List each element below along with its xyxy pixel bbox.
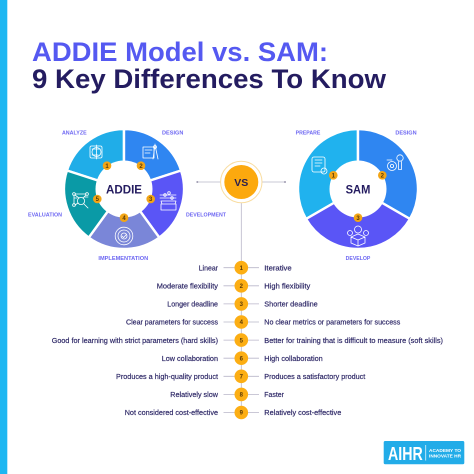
icon: design bbox=[387, 155, 403, 170]
row 4: Clear parameters for success bbox=[126, 318, 218, 327]
icon: analyze bbox=[90, 145, 102, 159]
row 9 bbox=[125, 406, 341, 419]
chart: ADDIE wheel bbox=[28, 129, 227, 262]
badge: ADDIE 2: 2 bbox=[139, 164, 143, 170]
label: design: DESIGN bbox=[395, 130, 417, 136]
row 8: 8 bbox=[240, 393, 244, 399]
badge: ADDIE 2 bbox=[137, 161, 145, 170]
badge: ADDIE 3: 3 bbox=[149, 197, 153, 203]
icon: prepare bbox=[312, 157, 327, 174]
segment: development bbox=[124, 170, 184, 238]
logo: AIHR: INNOVATE HR bbox=[429, 453, 461, 458]
row 6: High collaboration bbox=[264, 354, 323, 363]
label: implementation: IMPLEMENTATION bbox=[98, 256, 148, 262]
segment: implementation bbox=[89, 189, 159, 249]
label: develop: DEVELOP bbox=[346, 256, 371, 262]
segment: develop bbox=[306, 189, 410, 249]
badge: ADDIE 5: 5 bbox=[96, 197, 100, 203]
segment: design bbox=[124, 129, 181, 189]
logo: AIHR: AIHR bbox=[388, 444, 423, 464]
row 6: 6 bbox=[240, 356, 244, 362]
row 8: Relatively slow bbox=[170, 390, 218, 399]
segment: design bbox=[358, 129, 418, 219]
label: design: DESIGN bbox=[162, 130, 183, 136]
row 4: No clear metrics or parameters for success bbox=[264, 318, 400, 327]
row 9: 9 bbox=[240, 411, 244, 417]
icon: develop bbox=[348, 226, 368, 246]
icon: evaluation bbox=[73, 193, 88, 208]
center hub: ADDIE: ADDIE bbox=[106, 184, 142, 196]
title bbox=[32, 37, 387, 94]
row 7: Produces a satisfactory product bbox=[264, 372, 366, 381]
segment: analyze bbox=[67, 129, 124, 189]
row 3: Longer deadline bbox=[167, 300, 218, 309]
connector: VS to wheels and list bbox=[196, 181, 286, 412]
icon: development bbox=[160, 192, 176, 210]
row 1: 1 bbox=[240, 266, 244, 272]
badge: ADDIE 1: 1 bbox=[105, 164, 109, 170]
row 2: High flexibility bbox=[264, 282, 310, 290]
row 3: Shorter deadline bbox=[264, 300, 318, 309]
row 2 bbox=[157, 279, 310, 293]
row 2: Moderate flexibility bbox=[157, 282, 218, 290]
row 4: 4 bbox=[240, 320, 244, 326]
logo: AIHR: ACADEMY TO bbox=[429, 448, 462, 453]
segment: prepare bbox=[298, 129, 358, 219]
badge: SAM 3: 3 bbox=[356, 216, 360, 222]
row 2: 2 bbox=[240, 284, 244, 290]
row 5: Good for learning with strict parameters (hard skills) bbox=[52, 336, 218, 345]
row 8 bbox=[170, 388, 284, 401]
center hub: SAM: SAM bbox=[346, 184, 370, 196]
row 3: 3 bbox=[240, 302, 244, 308]
label: prepare: PREPARE bbox=[296, 130, 321, 136]
badge: ADDIE 4: 4 bbox=[122, 216, 126, 222]
row 7: 7 bbox=[240, 374, 244, 380]
label: analyze: ANALYZE bbox=[62, 130, 87, 136]
icon: design bbox=[143, 144, 158, 159]
chart: SAM wheel bbox=[296, 129, 418, 262]
label: development: DEVELOPMENT bbox=[186, 213, 227, 219]
left accent bar bbox=[0, 0, 7, 474]
title: 9 Key Differences To Know bbox=[32, 64, 387, 94]
row 8: Faster bbox=[264, 390, 284, 399]
row 9: Relatively cost-effective bbox=[264, 408, 341, 417]
icon: implementation bbox=[115, 227, 133, 245]
row 9: Not considered cost-effective bbox=[125, 408, 218, 417]
row 7 bbox=[116, 370, 366, 383]
title: ADDIE Model vs. SAM: bbox=[32, 37, 328, 67]
logo: AIHR bbox=[384, 441, 464, 464]
row 5: 5 bbox=[240, 338, 244, 344]
badge: ADDIE 3 bbox=[146, 195, 155, 203]
row 6: Low collaboration bbox=[162, 354, 218, 363]
label: evaluation: EVALUATION bbox=[28, 213, 62, 219]
row 3 bbox=[167, 297, 318, 311]
row 5: Better for training that is difficult to measure (soft skills) bbox=[264, 336, 443, 345]
row 7: Produces a high-quality product bbox=[116, 372, 219, 381]
VS badge: VS bbox=[234, 177, 248, 189]
row 1 bbox=[199, 261, 292, 275]
row 1: Linear bbox=[199, 263, 218, 272]
badge: ADDIE 1 bbox=[103, 161, 111, 170]
row 1: Iterative bbox=[264, 263, 292, 272]
badge: SAM 1: 1 bbox=[332, 173, 336, 179]
center hub: ADDIE bbox=[96, 160, 152, 218]
comparison rows bbox=[52, 261, 443, 419]
row 4 bbox=[126, 315, 400, 329]
badge: ADDIE 4 bbox=[120, 213, 128, 222]
badge: ADDIE 5 bbox=[93, 195, 102, 203]
row 6 bbox=[162, 351, 323, 365]
row 5 bbox=[52, 333, 443, 347]
segment: evaluation bbox=[64, 170, 124, 238]
VS badge bbox=[221, 161, 262, 203]
badge: SAM 2: 2 bbox=[381, 173, 385, 179]
